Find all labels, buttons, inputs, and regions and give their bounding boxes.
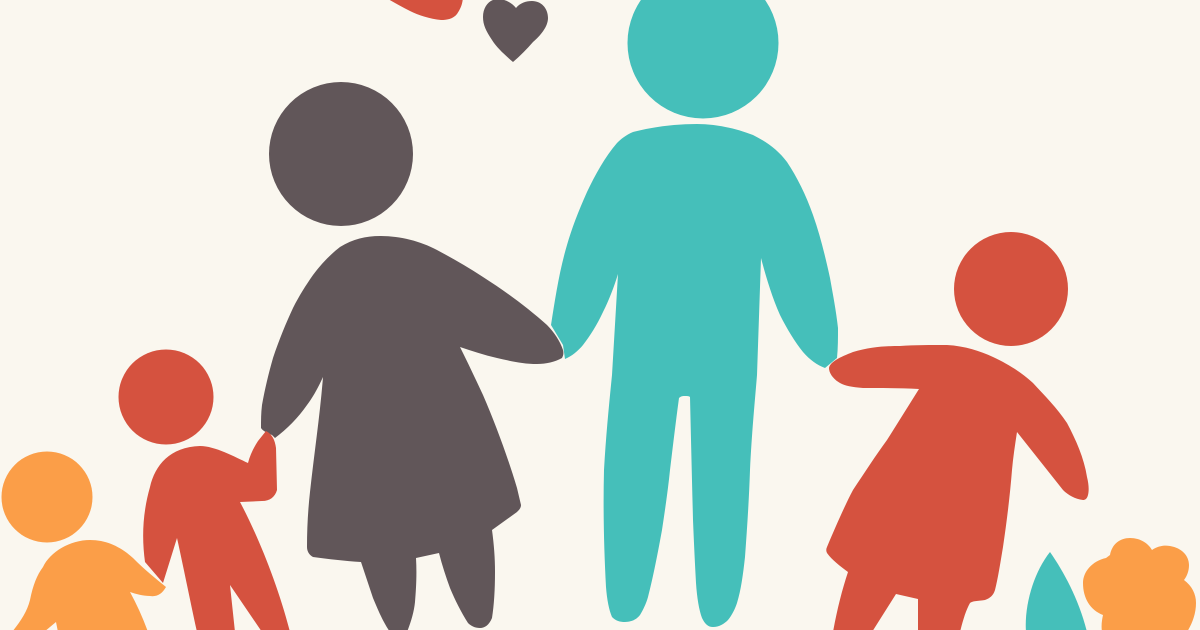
figure: mother xyxy=(261,82,563,630)
son body xyxy=(143,431,290,630)
father body xyxy=(551,124,838,627)
father head xyxy=(628,0,778,118)
icon: dark heart xyxy=(483,0,548,62)
figure: father xyxy=(551,0,838,627)
mother body xyxy=(261,236,563,630)
toddler head xyxy=(2,452,92,542)
figure: son xyxy=(118,350,290,630)
daughter body xyxy=(826,345,1089,630)
icon: teal leaf xyxy=(1026,552,1087,630)
icon: red heart xyxy=(388,0,463,20)
son head xyxy=(118,350,214,444)
daughter head xyxy=(954,232,1068,346)
figure: toddler xyxy=(2,452,166,630)
figure: daughter xyxy=(826,232,1089,630)
icon: orange flower bush xyxy=(1083,538,1196,630)
mother head xyxy=(269,82,413,226)
toddler body xyxy=(12,540,166,630)
